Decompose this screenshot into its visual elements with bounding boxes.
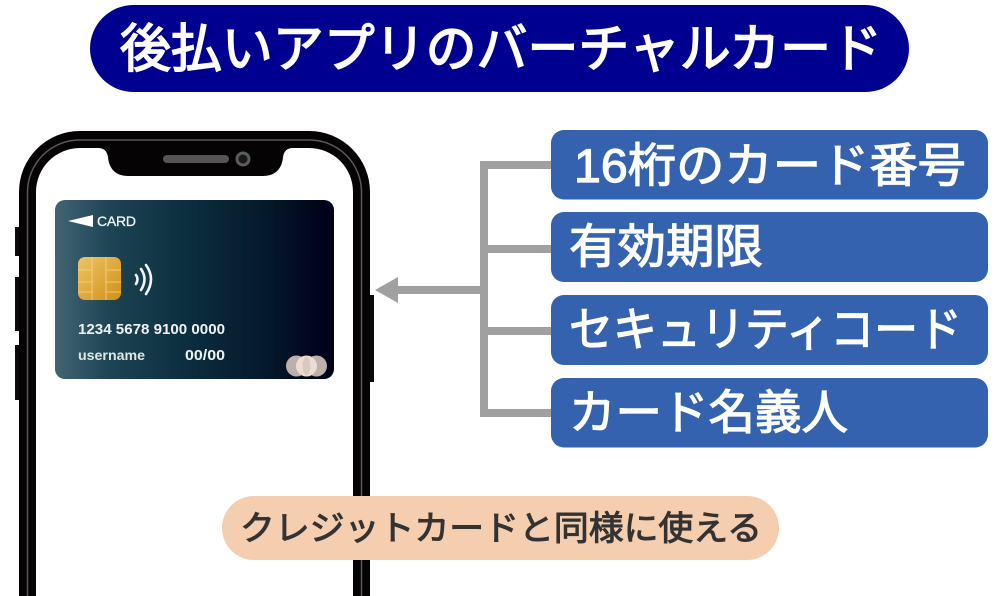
caption pill bbox=[222, 496, 779, 560]
card holder: username bbox=[78, 347, 145, 363]
speaker bbox=[163, 155, 229, 163]
item: cardholder name bbox=[551, 378, 988, 448]
camera bbox=[236, 152, 250, 166]
phone body bbox=[19, 131, 370, 596]
phone illustration bbox=[15, 131, 374, 596]
connector bracket and arrow bbox=[375, 161, 552, 417]
item: expiry date bbox=[551, 212, 988, 282]
card expiry: 00/00 bbox=[185, 347, 225, 364]
contactless icon bbox=[136, 265, 151, 294]
item: card number bbox=[551, 130, 988, 200]
title pill bbox=[90, 5, 909, 92]
item: cardholder name: カード名義人 bbox=[569, 386, 848, 439]
credit card bbox=[55, 200, 334, 379]
card brand mark: CARD bbox=[97, 213, 136, 229]
item: security code: セキュリティコード bbox=[569, 303, 962, 356]
item: card number: 16桁のカード番号 bbox=[574, 139, 966, 192]
phone side buttons bbox=[15, 227, 374, 400]
caption pill: クレジットカードと同様に使える bbox=[240, 510, 762, 548]
card number: 1234 5678 9100 0000 bbox=[78, 321, 225, 338]
card brand mark bbox=[68, 213, 136, 229]
card network logo bbox=[286, 356, 327, 376]
title pill: 後払いアプリのバーチャルカード bbox=[120, 21, 882, 79]
phone screen with notch bbox=[36, 148, 353, 596]
item: expiry date: 有効期限 bbox=[569, 220, 763, 273]
IC chip bbox=[78, 257, 121, 300]
